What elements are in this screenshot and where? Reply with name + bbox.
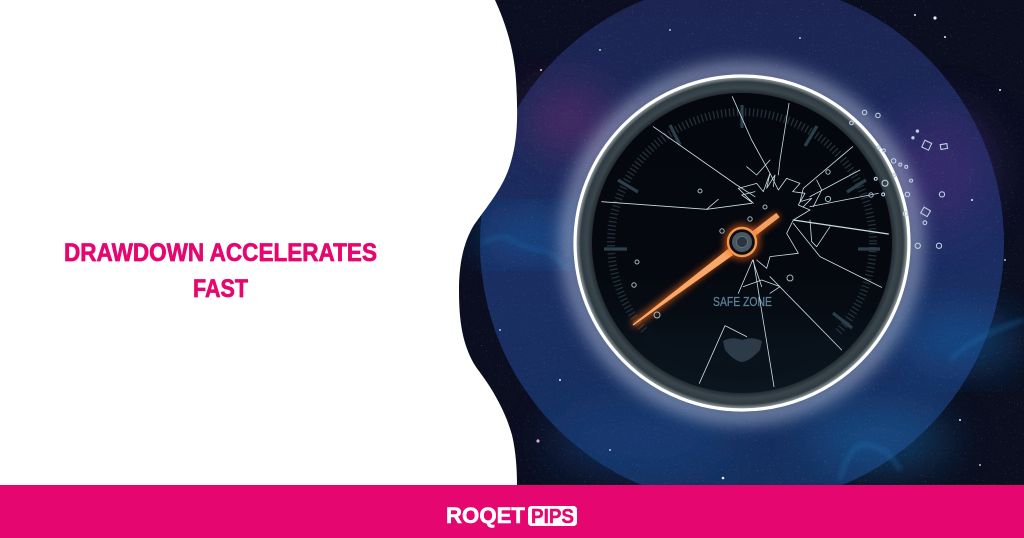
needle hub xyxy=(724,224,760,260)
glass cracks xyxy=(602,97,888,387)
safe zone label: SAFE ZONE xyxy=(713,294,772,309)
needle xyxy=(633,215,778,325)
dial face xyxy=(592,93,892,393)
major ticks xyxy=(604,105,880,328)
bezel xyxy=(575,76,909,410)
flying glass debris xyxy=(850,110,948,248)
nebula clouds xyxy=(475,88,1024,480)
minor ticks xyxy=(611,112,873,374)
shield icon xyxy=(723,338,762,362)
title xyxy=(64,239,377,303)
footer bar xyxy=(0,485,1024,538)
white glowing ring xyxy=(575,76,909,410)
ring glow xyxy=(570,71,914,415)
glass fragments inside dial xyxy=(632,170,873,318)
large halo disc xyxy=(480,0,1004,505)
logo xyxy=(446,503,577,528)
title: FAST xyxy=(193,275,248,303)
panel: white wavy text area xyxy=(0,0,517,485)
panel: space background xyxy=(440,0,1024,505)
wordmark: roqet: ROQET xyxy=(446,503,526,528)
tick-free lower arc xyxy=(646,332,838,374)
gauge xyxy=(570,71,914,415)
wordmark badge: pips: PIPS xyxy=(531,506,574,528)
bright stars xyxy=(499,14,1006,479)
title: DRAWDOWN ACCELERATES xyxy=(64,239,377,267)
star field xyxy=(440,0,1024,485)
